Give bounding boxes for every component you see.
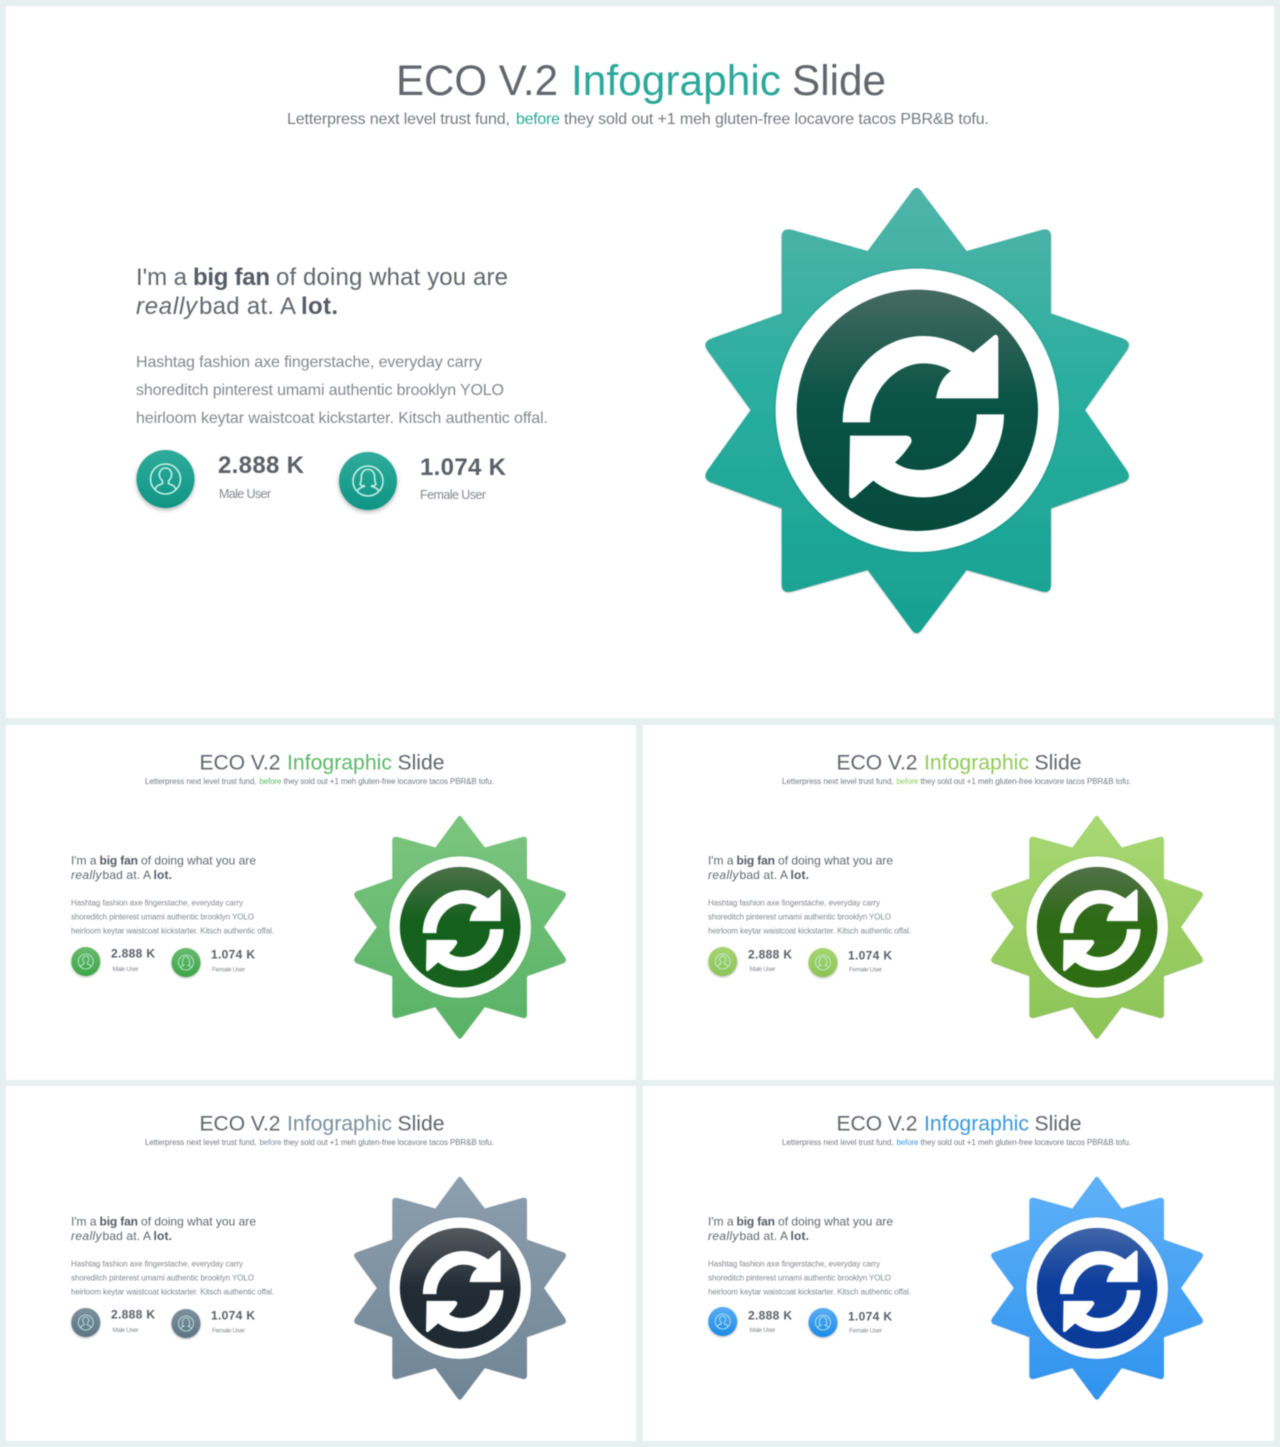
stat: female user: 1.074 K bbox=[848, 1310, 892, 1324]
title: Infographic bbox=[924, 1112, 1029, 1136]
heading: I'm a bbox=[708, 854, 734, 868]
title bbox=[200, 1112, 444, 1136]
heading: I'm a bbox=[71, 1214, 97, 1228]
body text: shoreditch pinterest umami authentic brooklyn YOLO bbox=[71, 1274, 254, 1282]
heading: lot. bbox=[790, 1229, 809, 1243]
title: Slide bbox=[1034, 1112, 1082, 1136]
body text: Hashtag fashion axe fingerstache, everyday carry bbox=[136, 354, 482, 371]
stat: male user bbox=[708, 947, 792, 976]
icon: sun badge with refresh arrows bbox=[991, 816, 1203, 1039]
stat: female user: Female User bbox=[212, 1328, 245, 1334]
body text bbox=[71, 1260, 274, 1296]
subtitle: before bbox=[896, 777, 919, 786]
title: Infographic bbox=[287, 1112, 392, 1136]
stat: female user: 1.074 K bbox=[420, 454, 507, 481]
title: ECO V.2 bbox=[200, 1112, 280, 1136]
heading: really bbox=[71, 1229, 102, 1243]
heading: lot. bbox=[154, 868, 172, 882]
title: Infographic bbox=[924, 750, 1029, 774]
heading: bad at. A bbox=[102, 868, 151, 882]
stat: male user bbox=[136, 450, 305, 508]
stat: male user: 2.888 K bbox=[111, 946, 155, 960]
stat: male user bbox=[708, 1307, 792, 1336]
stat: male user bbox=[71, 1308, 155, 1337]
heading: of doing what you are bbox=[141, 1214, 256, 1228]
heading: of doing what you are bbox=[141, 854, 256, 868]
stat: male user: 2.888 K bbox=[111, 1308, 155, 1322]
heading: lot. bbox=[790, 868, 809, 882]
heading bbox=[136, 264, 508, 320]
subtitle bbox=[782, 1138, 1131, 1147]
subtitle: Letterpress next level trust fund, bbox=[145, 777, 256, 786]
subtitle: Letterpress next level trust fund, bbox=[782, 777, 894, 786]
icon: sun badge with refresh arrows bbox=[991, 1177, 1203, 1400]
subtitle: before bbox=[260, 1138, 282, 1147]
icon: sun badge with refresh arrows bbox=[705, 188, 1129, 633]
subtitle: Letterpress next level trust fund, bbox=[145, 1138, 256, 1147]
stat: male user: Male User bbox=[112, 966, 138, 973]
heading: really bbox=[71, 868, 102, 882]
body text: shoreditch pinterest umami authentic brooklyn YOLO bbox=[71, 912, 254, 922]
stat: female user: Female User bbox=[849, 1328, 882, 1334]
body text: Hashtag fashion axe fingerstache, everyday carry bbox=[71, 1260, 243, 1268]
stat: male user: 2.888 K bbox=[748, 1308, 792, 1322]
body text: shoreditch pinterest umami authentic brooklyn YOLO bbox=[136, 382, 504, 399]
title: Slide bbox=[1034, 750, 1082, 774]
heading: I'm a bbox=[71, 854, 97, 868]
title bbox=[200, 750, 444, 774]
body text: Hashtag fashion axe fingerstache, everyday carry bbox=[708, 898, 880, 908]
subtitle: they sold out +1 meh gluten-free locavore tacos PBR&B tofu. bbox=[920, 1138, 1131, 1147]
heading: big fan bbox=[736, 1214, 775, 1228]
heading: big fan bbox=[100, 1214, 138, 1228]
stat: male user bbox=[71, 946, 155, 976]
heading: I'm a bbox=[136, 264, 188, 291]
title: Infographic bbox=[571, 57, 781, 105]
subtitle: before bbox=[260, 777, 282, 786]
stat: female user: Female User bbox=[849, 966, 882, 974]
stat: female user: Female User bbox=[420, 488, 486, 502]
subtitle bbox=[782, 777, 1131, 786]
subtitle: they sold out +1 meh gluten-free locavore tacos PBR&B tofu. bbox=[920, 777, 1131, 786]
body text: Hashtag fashion axe fingerstache, everyday carry bbox=[708, 1260, 880, 1268]
title bbox=[396, 57, 886, 105]
panel: teal main slide bbox=[6, 6, 1274, 718]
body text: heirloom keytar waistcoat kickstarter. Kitsch authentic offal. bbox=[708, 1288, 911, 1296]
heading: bad at. A bbox=[102, 1229, 151, 1243]
panel: green slide bbox=[6, 725, 636, 1080]
title: ECO V.2 bbox=[836, 1112, 918, 1136]
title: Slide bbox=[398, 750, 444, 774]
body text: Hashtag fashion axe fingerstache, everyday carry bbox=[71, 898, 243, 908]
stat: female user: 1.074 K bbox=[211, 948, 255, 962]
body text: heirloom keytar waistcoat kickstarter. Kitsch authentic offal. bbox=[71, 1288, 274, 1296]
subtitle: Letterpress next level trust fund, bbox=[287, 111, 510, 128]
subtitle bbox=[145, 1138, 494, 1147]
heading: really bbox=[708, 1229, 740, 1243]
heading: lot. bbox=[154, 1229, 172, 1243]
body text bbox=[708, 898, 911, 936]
heading bbox=[71, 854, 256, 882]
title bbox=[836, 1112, 1082, 1136]
body text: heirloom keytar waistcoat kickstarter. Kitsch authentic offal. bbox=[71, 926, 274, 936]
panel: blue slide bbox=[643, 1086, 1274, 1441]
stat: female user: 1.074 K bbox=[211, 1308, 255, 1322]
stat: male user: 2.888 K bbox=[218, 452, 305, 479]
stat: female user: Female User bbox=[212, 966, 245, 974]
heading: big fan bbox=[736, 854, 775, 868]
heading: big fan bbox=[193, 264, 270, 291]
heading: of doing what you are bbox=[276, 264, 508, 291]
body text bbox=[136, 354, 548, 427]
panel: slate grey slide bbox=[6, 1086, 636, 1441]
body text bbox=[708, 1260, 911, 1296]
heading: bad at. A bbox=[199, 293, 296, 320]
icon: sun badge with refresh arrows bbox=[354, 816, 566, 1039]
title: ECO V.2 bbox=[396, 57, 558, 105]
heading: I'm a bbox=[708, 1214, 734, 1228]
heading: bad at. A bbox=[740, 868, 788, 882]
stat: male user: Male User bbox=[750, 1327, 776, 1334]
stat: male user: Male User bbox=[112, 1327, 138, 1334]
stat: female user: 1.074 K bbox=[848, 948, 892, 962]
subtitle: they sold out +1 meh gluten-free locavore tacos PBR&B tofu. bbox=[284, 777, 494, 786]
panel: light green slide bbox=[643, 725, 1274, 1080]
heading bbox=[708, 854, 893, 882]
body text: heirloom keytar waistcoat kickstarter. Kitsch authentic offal. bbox=[136, 410, 548, 427]
heading: of doing what you are bbox=[778, 1214, 893, 1228]
body text bbox=[71, 898, 274, 936]
heading bbox=[708, 1214, 893, 1243]
stat: female user bbox=[808, 948, 892, 977]
subtitle: they sold out +1 meh gluten-free locavore tacos PBR&B tofu. bbox=[564, 111, 989, 128]
icon: sun badge with refresh arrows bbox=[354, 1177, 566, 1400]
subtitle: before bbox=[896, 1138, 919, 1147]
heading bbox=[71, 1214, 256, 1243]
subtitle: before bbox=[516, 111, 560, 128]
heading: of doing what you are bbox=[778, 854, 893, 868]
title: ECO V.2 bbox=[200, 750, 280, 774]
stat: male user: Male User bbox=[219, 487, 271, 501]
stat: male user: 2.888 K bbox=[748, 948, 792, 962]
subtitle: they sold out +1 meh gluten-free locavore tacos PBR&B tofu. bbox=[284, 1138, 494, 1147]
subtitle bbox=[287, 111, 989, 128]
body text: heirloom keytar waistcoat kickstarter. Kitsch authentic offal. bbox=[708, 926, 911, 936]
title: Slide bbox=[398, 1112, 444, 1136]
stat: female user bbox=[339, 452, 507, 510]
subtitle bbox=[145, 777, 494, 786]
heading: bad at. A bbox=[740, 1229, 788, 1243]
heading: really bbox=[708, 868, 740, 882]
subtitle: Letterpress next level trust fund, bbox=[782, 1138, 894, 1147]
stat: female user bbox=[808, 1308, 892, 1337]
body text: shoreditch pinterest umami authentic brooklyn YOLO bbox=[708, 912, 891, 922]
heading: big fan bbox=[100, 854, 138, 868]
stat: female user bbox=[172, 948, 255, 977]
body text: shoreditch pinterest umami authentic brooklyn YOLO bbox=[708, 1274, 891, 1282]
title: ECO V.2 bbox=[836, 750, 918, 774]
stat: female user bbox=[172, 1308, 255, 1338]
heading: lot. bbox=[301, 293, 338, 320]
heading: really bbox=[136, 293, 199, 320]
stat: male user: Male User bbox=[750, 966, 776, 973]
title bbox=[836, 750, 1082, 774]
title: Slide bbox=[792, 57, 886, 105]
title: Infographic bbox=[287, 750, 392, 774]
